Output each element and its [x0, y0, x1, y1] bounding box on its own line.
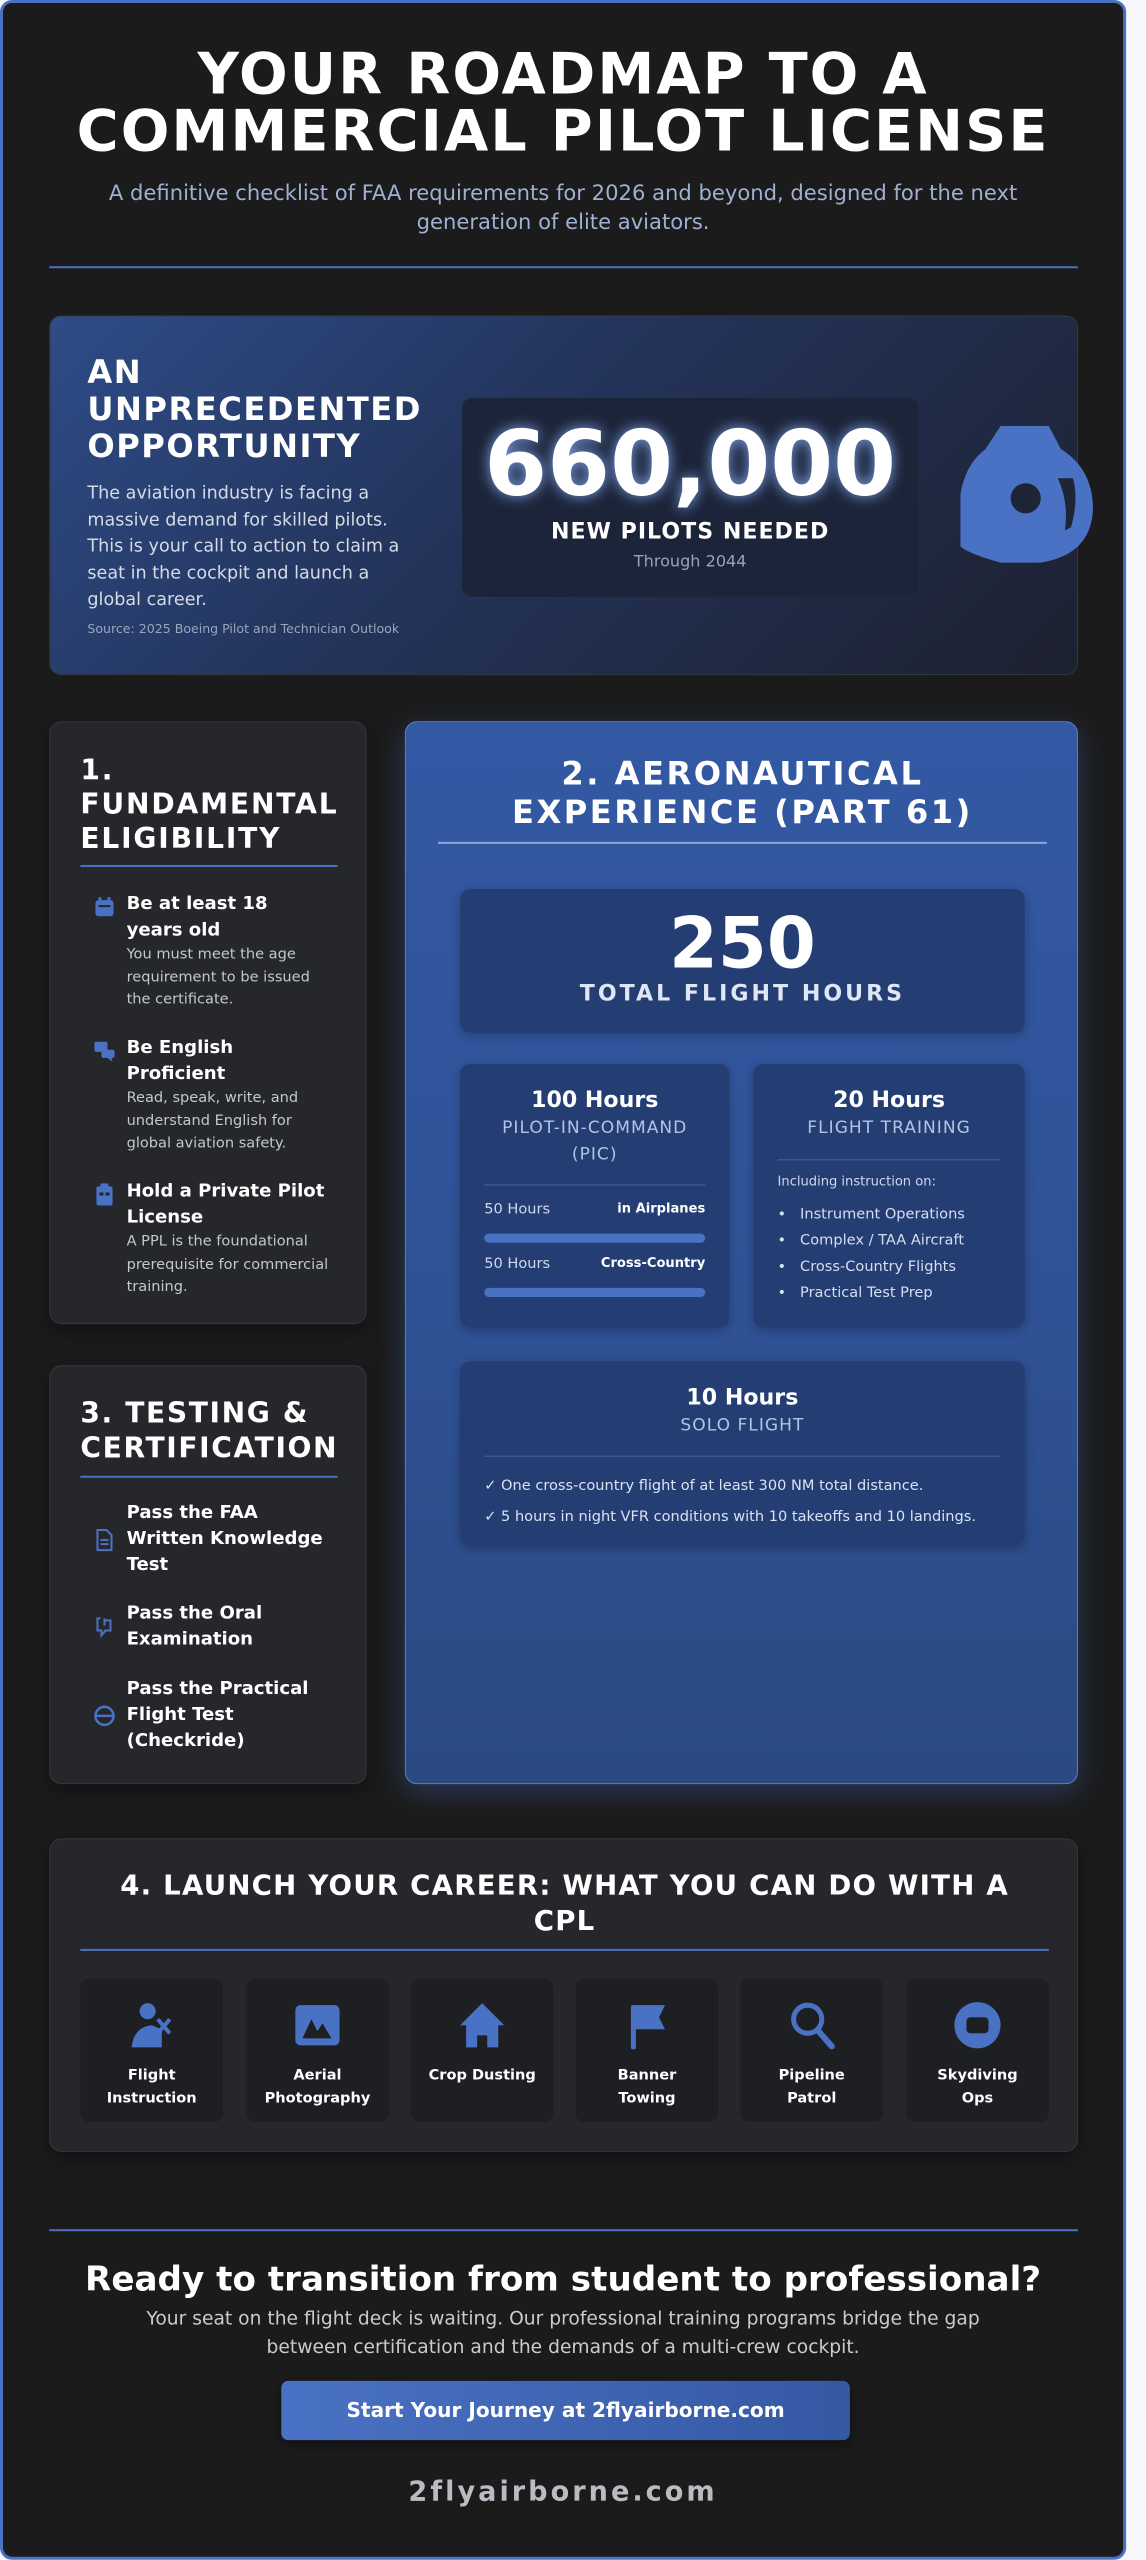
stat box: 660,000: NEW PILOTS NEEDED: [551, 519, 829, 544]
tile: skydiving ops: Ops: [962, 2091, 993, 2107]
item: english: Be English Proficient: [127, 1037, 233, 1084]
box: 10 hours solo: 10 Hours: [686, 1385, 798, 1410]
box: 10 hours solo: [460, 1361, 1025, 1545]
box: 10 hours solo: ✓ 5 hours in night VFR conditions with 10 takeoffs and 10 landings.: [484, 1509, 976, 1525]
bullet list: • Instrument Operations: [778, 1207, 965, 1223]
item: checkride: Pass the Practical Flight Test (Checkride): [127, 1678, 309, 1751]
panel: opportunity hero: [49, 315, 1078, 675]
CTA paragraph: Your seat on the flight deck is waiting. Our professional training programs bridge the gap between certification and the demands of a multi-crew cockpit.: [146, 2309, 980, 2358]
box: 250 total hours: 250: [669, 902, 816, 985]
title: YOUR ROADMAP TO A: [198, 41, 929, 107]
heading: 4. LAUNCH YOUR CAREER: WHAT YOU CAN DO WITH A CPL: [120, 1870, 1009, 1937]
item: oral exam: Pass the Oral Examination: [127, 1602, 262, 1650]
tile: crop dusting: [411, 1979, 554, 2122]
panel: 2 aeronautical experience: [405, 721, 1078, 1784]
item: age: You must meet the age requirement to be issued the certificate.: [127, 946, 310, 1008]
panel: 1 fundamental eligibility: [49, 721, 367, 1324]
tile: flight instruction: [80, 1979, 223, 2122]
heading: 2. AERONAUTICAL: [561, 754, 923, 793]
hero heading: AN UNPRECEDENTED OPPORTUNITY: [87, 353, 422, 465]
bullet list: • Complex / TAA Aircraft: [778, 1233, 964, 1249]
row: airplanes: 50 Hours: [484, 1202, 550, 1218]
title: COMMERCIAL PILOT LICENSE: [77, 98, 1049, 165]
tile: banner towing: Towing: [618, 2091, 676, 2107]
box: 100 hours PIC: (PIC): [572, 1144, 618, 1164]
CTA button: Start Your Journey at 2flyairborne.com: [347, 2398, 785, 2422]
heading: 3. TESTING & CERTIFICATION: [80, 1396, 338, 1465]
hero paragraph: The aviation industry is facing a massive demand for skilled pilots. This is your call to action to claim a seat in the cockpit and launch a global career.: [87, 483, 399, 610]
tile: pipeline patrol: [740, 1979, 883, 2122]
subtitle: A definitive checklist of FAA requirements for 2026 and beyond, designed for the next generation of elite aviators.: [109, 181, 1017, 234]
tile: flight instruction: Instruction: [107, 2091, 197, 2107]
item: private pilot license: [96, 1180, 328, 1295]
tile: pipeline patrol: Patrol: [787, 2091, 836, 2107]
item: age: [95, 893, 310, 1008]
CTA button: [281, 2381, 850, 2440]
item: english: Read, speak, write, and understand English for global aviation safety.: [127, 1090, 298, 1151]
heading: EXPERIENCE (PART 61): [512, 793, 973, 831]
box: 20 hours flight training: [753, 1064, 1025, 1327]
tile: crop dusting: Crop Dusting: [429, 2067, 536, 2084]
icon: oral: [96, 1617, 112, 1638]
tile: aerial photography: [246, 1979, 389, 2122]
tile: banner towing: [576, 1979, 718, 2122]
box: 20 hours flight training: Including instruction on:: [778, 1174, 936, 1189]
box: 250 total hours: [460, 889, 1025, 1033]
row: cross-country: [484, 1256, 705, 1272]
item: written test: Pass the FAA Written Knowledge Test: [127, 1502, 323, 1575]
title: [77, 41, 1049, 165]
tile: flight instruction: Flight: [128, 2067, 176, 2084]
row: airplanes: [484, 1202, 705, 1218]
bullet list: • Cross-Country Flights: [778, 1259, 956, 1275]
panel: 3 testing & certification: [49, 1365, 367, 1784]
item: age: Be at least 18 years old: [127, 893, 268, 940]
footer brand: 2flyairborne.com: [408, 2476, 718, 2507]
box: 100 hours PIC: [460, 1064, 729, 1327]
tile: banner towing: Banner: [618, 2067, 676, 2084]
stat box: 660,000: 660,000: [484, 411, 896, 516]
stat box: 660,000: Through 2044: [634, 552, 746, 571]
box: 20 hours flight training: 20 Hours: [833, 1088, 945, 1113]
bullet list: • Practical Test Prep: [778, 1285, 933, 1301]
tile: aerial photography: Aerial: [293, 2067, 342, 2084]
tile: skydiving ops: [906, 1979, 1049, 2122]
box: 20 hours flight training: FLIGHT TRAINING: [807, 1118, 971, 1138]
bullet list: [778, 1207, 965, 1301]
item: private pilot license: A PPL is the foundational prerequisite for commercial training.: [127, 1234, 328, 1295]
tile: aerial photography: Photography: [265, 2091, 370, 2107]
tile: skydiving ops: Skydiving: [937, 2067, 1018, 2084]
heading: 1. FUNDAMENTAL ELIGIBILITY: [80, 753, 338, 855]
icon: pilot helmet: [960, 426, 1093, 563]
icon: checkride: [94, 1706, 115, 1726]
icon: clipboard: [96, 1183, 112, 1206]
panel: 4 launch your career: [49, 1838, 1078, 2152]
tile: pipeline patrol: Pipeline: [779, 2067, 845, 2084]
row: airplanes: in Airplanes: [617, 1202, 705, 1217]
item: private pilot license: Hold a Private Pilot License: [127, 1180, 324, 1228]
row: cross-country: Cross-Country: [601, 1256, 705, 1271]
heading: [512, 754, 973, 831]
box: 100 hours PIC: 100 Hours: [531, 1088, 658, 1113]
CTA heading: Ready to transition from student to professional?: [85, 2259, 1041, 2300]
icon: calendar: [95, 897, 114, 916]
box: 10 hours solo: SOLO FLIGHT: [680, 1415, 804, 1436]
icon: chat: [94, 1042, 114, 1062]
source: Source: 2025 Boeing Pilot and Technician Outlook: [87, 621, 399, 636]
box: 10 hours solo: ✓ One cross-country flight of at least 300 NM total distance.: [484, 1478, 923, 1494]
icon: document: [96, 1529, 112, 1552]
row: cross-country: 50 Hours: [484, 1256, 550, 1272]
box: 250 total hours: TOTAL FLIGHT HOURS: [580, 981, 905, 1007]
stat box: 660,000: [462, 398, 918, 597]
item: english: [94, 1037, 298, 1151]
box: 100 hours PIC: PILOT-IN-COMMAND: [502, 1118, 687, 1138]
